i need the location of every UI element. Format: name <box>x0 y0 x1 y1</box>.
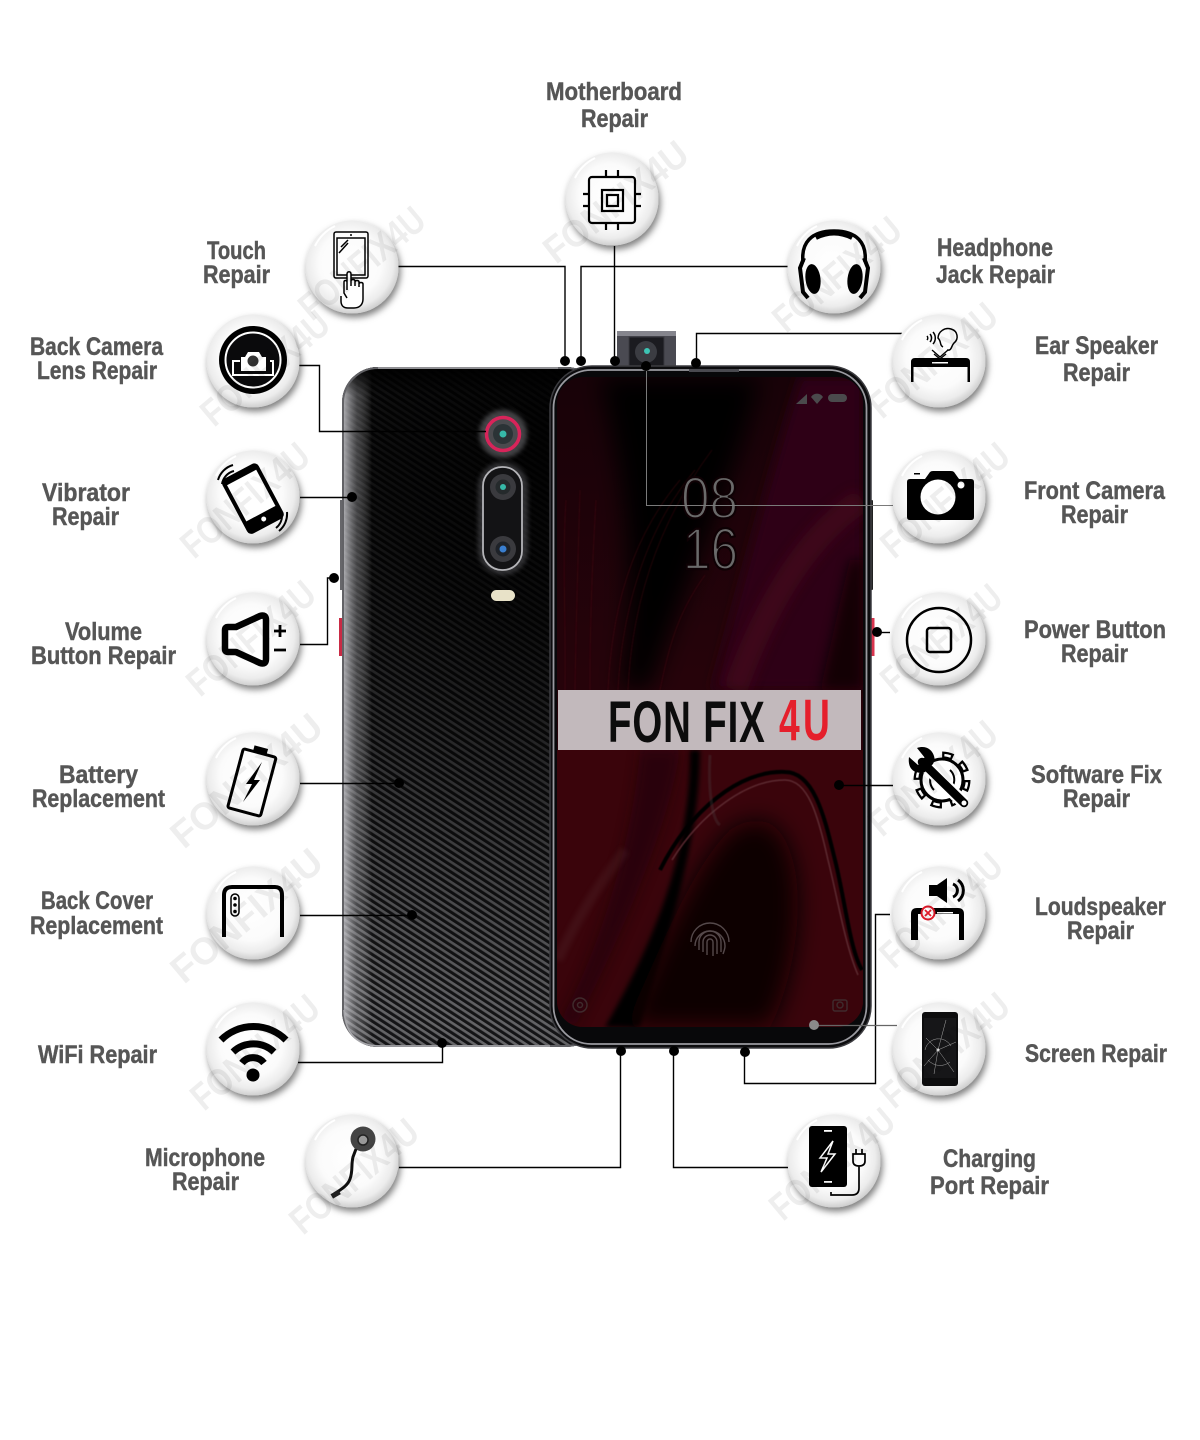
icon: back cover: FONFIX4U <box>163 841 332 992</box>
back flash <box>491 590 515 601</box>
label: vibrator repair: Vibrator <box>42 479 130 507</box>
label: headphone jack repair: Headphone <box>937 234 1053 262</box>
label: back cover replacement <box>30 887 164 940</box>
connector: screen <box>814 1024 897 1026</box>
icon: software wrench and gear: FONFIX4U <box>861 713 1007 845</box>
label: loudspeaker repair: Repair <box>1067 917 1134 945</box>
icon: loudspeaker <box>872 845 1011 977</box>
label: software fix repair: Repair <box>1063 785 1130 813</box>
connector: ear speaker <box>696 334 902 363</box>
label: front camera repair: Front Camera <box>1024 477 1166 505</box>
label: volume button repair: Button Repair <box>31 642 176 670</box>
icon: charging port <box>762 1100 904 1229</box>
label: battery replacement: Replacement <box>32 785 166 813</box>
label: charging port repair <box>930 1145 1049 1200</box>
connector: touch <box>398 266 565 361</box>
label: motherboard repair <box>546 78 682 133</box>
label: back camera lens repair: Lens Repair <box>37 357 157 385</box>
label: ear speaker repair <box>1035 332 1158 387</box>
icon: motherboard: FONFIX4U <box>536 133 697 272</box>
label: microphone repair: Microphone <box>145 1144 265 1172</box>
icon: charging port: FONFIX4U <box>762 1100 904 1229</box>
icon: microphone flex: FONFIX4U <box>282 1111 428 1243</box>
label: motherboard repair: Repair <box>581 105 648 133</box>
label: back camera lens repair <box>30 333 164 385</box>
label: loudspeaker repair <box>1035 893 1166 945</box>
lock screen clock: 08 <box>681 466 738 531</box>
connector: back cover <box>300 914 412 916</box>
brand banner: 4U <box>779 687 830 753</box>
icon: ear speaker: FONFIX4U <box>861 295 1007 427</box>
label: power button repair: Power Button <box>1024 616 1166 644</box>
label: ear speaker repair: Ear Speaker <box>1035 332 1158 360</box>
label: battery replacement: Battery <box>59 761 138 789</box>
label: wifi repair: WiFi Repair <box>38 1041 157 1069</box>
phone front view: 16 <box>683 517 738 582</box>
label: software fix repair <box>1031 761 1162 813</box>
label: power button repair <box>1024 616 1166 668</box>
label: microphone repair: Repair <box>172 1168 239 1196</box>
label: motherboard repair: Motherboard <box>546 78 682 106</box>
brand banner <box>558 687 861 755</box>
label: vibrator repair: Repair <box>52 503 119 531</box>
label: microphone repair <box>145 1144 265 1196</box>
brand banner: FON FIX <box>608 689 765 755</box>
label: charging port repair: Charging <box>943 1145 1036 1173</box>
icon: touch screen: FONFIX4U <box>291 199 434 329</box>
icon: battery: FONFIX4U <box>163 706 332 857</box>
label: power button repair: Repair <box>1061 640 1128 668</box>
label: vibrator repair <box>42 479 130 531</box>
icon: cracked screen: FONFIX4U <box>873 985 1019 1117</box>
label: ear speaker repair: Repair <box>1063 359 1130 387</box>
screen wallpaper <box>557 377 863 1027</box>
icon: vibrating phone: FONFIX4U <box>173 435 319 567</box>
label: back cover replacement: Replacement <box>30 912 164 940</box>
left fine streaks <box>564 450 712 690</box>
label: headphone jack repair: Jack Repair <box>936 261 1055 289</box>
screen shortcut icons <box>573 998 847 1012</box>
icon: loudspeaker: FONFIX4U <box>872 845 1011 977</box>
label: front camera repair <box>1024 477 1166 529</box>
fingerprint <box>691 923 729 956</box>
label: volume button repair: Volume <box>65 618 142 646</box>
connector: wifi <box>298 1043 442 1062</box>
label: touch repair: Repair <box>203 261 270 289</box>
status icons <box>796 394 847 404</box>
back camera main lens <box>479 410 527 458</box>
connector: front camera <box>646 366 893 506</box>
connector: volume <box>300 578 334 644</box>
icon: volume button: FONFIX4U <box>179 573 325 705</box>
connector: microphone <box>399 1051 620 1168</box>
label: volume button repair <box>31 618 176 670</box>
lower wallpaper <box>557 750 863 1027</box>
icon: power button <box>873 577 1011 702</box>
icon: headphones: FONFIX4U <box>765 209 911 341</box>
pop-up camera <box>617 331 676 369</box>
connector: loudspeaker <box>744 914 890 1084</box>
right maroon band <box>712 377 863 690</box>
icon: power button: FONFIX4U <box>873 577 1011 702</box>
label: battery replacement <box>32 761 166 813</box>
icon: back camera lens: FONFIX4U <box>193 303 339 435</box>
phone front view <box>550 331 874 1048</box>
label: front camera repair: Repair <box>1061 501 1128 529</box>
label: loudspeaker repair: Loudspeaker <box>1035 893 1166 921</box>
connector: back camera <box>299 366 486 432</box>
label: touch repair <box>203 237 270 289</box>
connector dots <box>329 356 882 1057</box>
back camera module <box>478 462 528 575</box>
phone rear view <box>339 367 602 1047</box>
label: screen repair: Screen Repair <box>1025 1040 1167 1068</box>
label: back cover replacement: Back Cover <box>41 887 153 915</box>
upper dark swathe <box>600 377 760 690</box>
connector: battery <box>300 782 399 784</box>
connector: motherboard <box>614 246 616 361</box>
icon: wifi: FONFIX4U <box>183 987 329 1119</box>
connector: vibrator <box>300 496 352 498</box>
connector: charging port <box>674 1051 788 1168</box>
connector: power <box>877 632 890 634</box>
label: back camera lens repair: Back Camera <box>30 333 164 361</box>
icon: front camera: FONFIX4U <box>873 435 1019 567</box>
label: touch repair: Touch <box>207 237 266 265</box>
label: software fix repair: Software Fix <box>1031 761 1162 789</box>
connector: software <box>839 784 893 786</box>
label: charging port repair: Port Repair <box>930 1172 1049 1200</box>
label: headphone jack repair <box>936 234 1055 289</box>
connector: headphone jack <box>581 266 788 361</box>
